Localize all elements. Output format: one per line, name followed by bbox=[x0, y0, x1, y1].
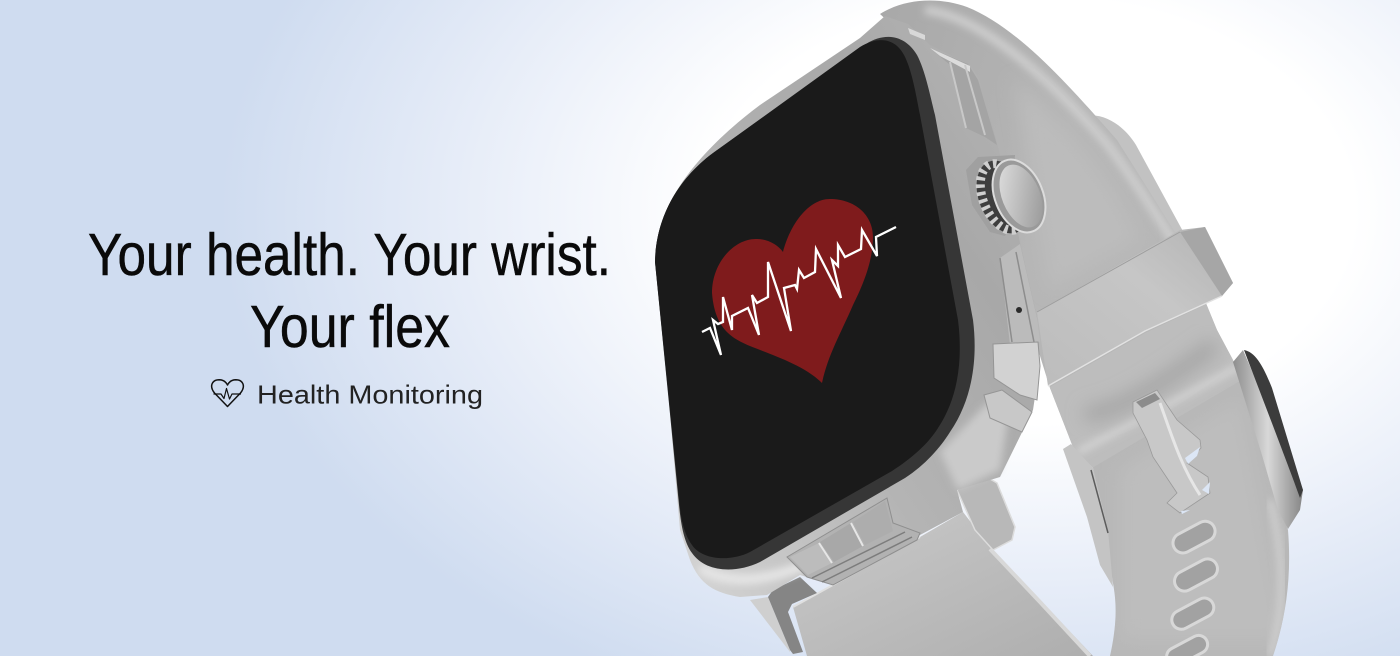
strap holes bbox=[1163, 518, 1221, 656]
strap tongue and slots bbox=[1133, 390, 1221, 656]
bottom button bbox=[787, 498, 920, 585]
rear strap band bbox=[1085, 115, 1185, 240]
label text: Health Monitoring bbox=[257, 380, 483, 410]
feature label: health monitoring bbox=[212, 380, 483, 410]
crown bbox=[966, 152, 1055, 241]
screen bezel bbox=[655, 37, 975, 569]
pulse line bbox=[702, 227, 896, 355]
strap lug left bbox=[1063, 444, 1113, 587]
side lug bbox=[957, 472, 1015, 550]
upper strap bbox=[880, 1, 1289, 656]
headline: Your health. Your wrist. bbox=[88, 222, 611, 288]
upper side rail bbox=[908, 28, 997, 145]
smartwatch bbox=[655, 1, 1303, 656]
bottom lug bbox=[750, 577, 817, 654]
lower strap bbox=[793, 512, 1093, 656]
screen bbox=[655, 40, 960, 558]
microphone hole bbox=[1016, 307, 1022, 313]
headline: Your flex bbox=[250, 294, 450, 360]
buckle bbox=[1233, 350, 1303, 529]
watch case bbox=[656, 16, 1040, 597]
headline bbox=[88, 222, 611, 360]
lower side rail bbox=[984, 244, 1040, 432]
icon: heart with pulse bbox=[212, 380, 243, 406]
heart on screen bbox=[702, 199, 896, 383]
strap band below keeper bbox=[1050, 304, 1237, 458]
strap keeper loop bbox=[1037, 227, 1233, 386]
